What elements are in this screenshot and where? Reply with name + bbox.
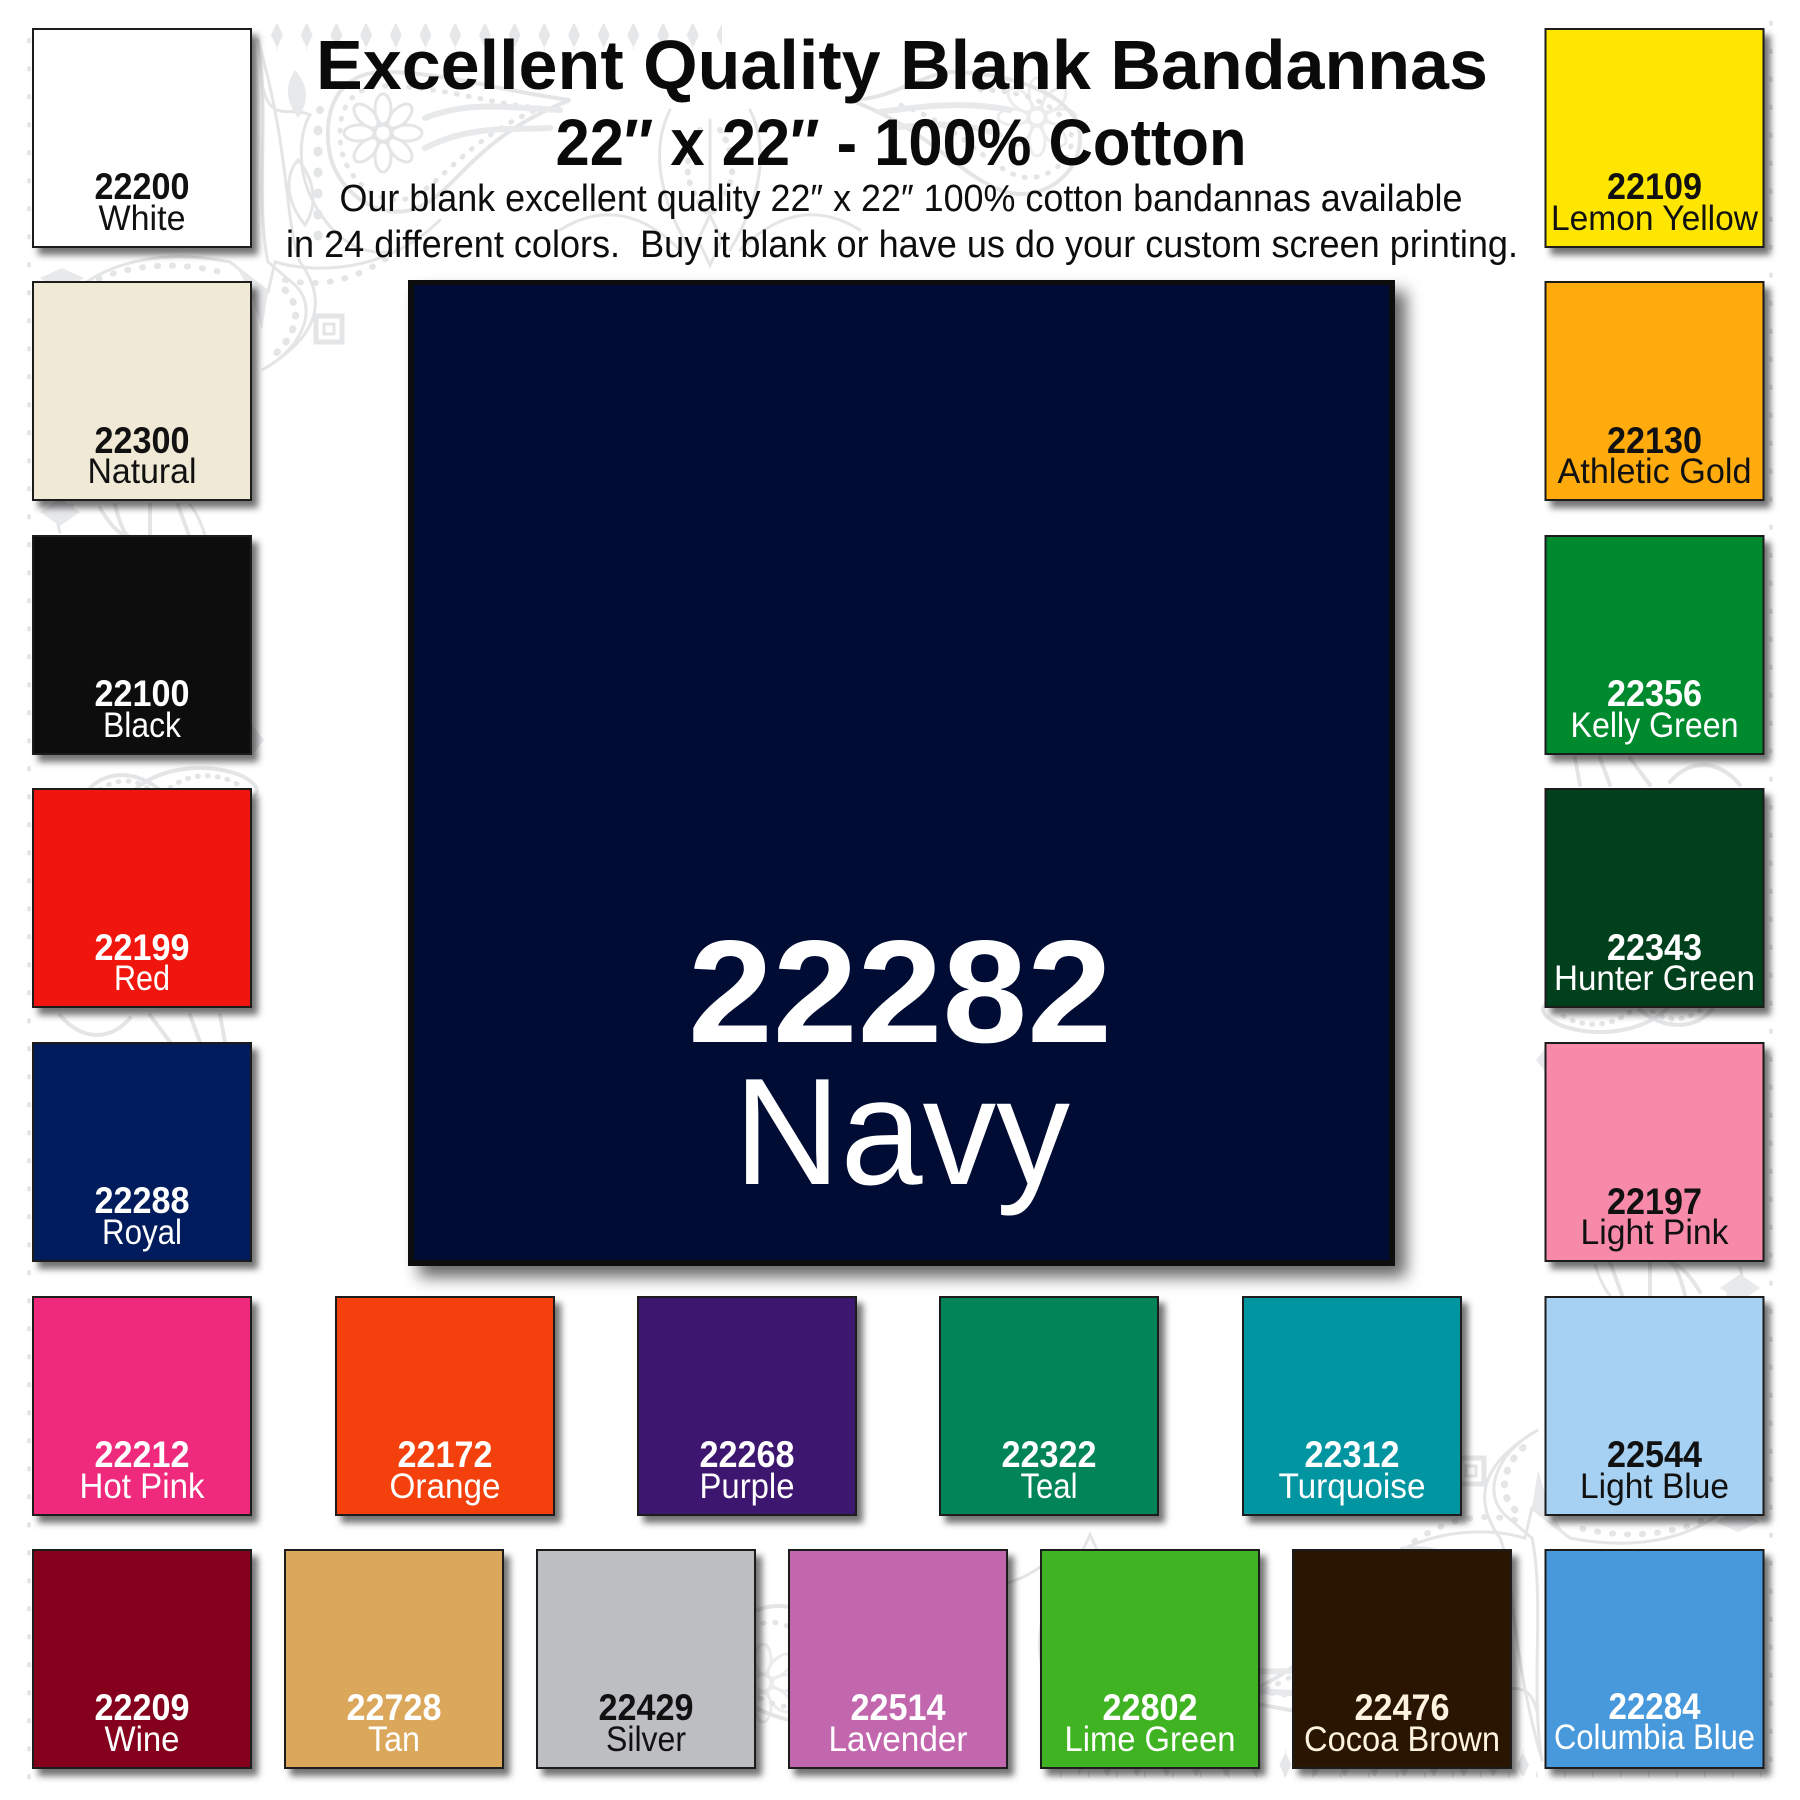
swatch: 22212 Hot Pink bbox=[33, 1297, 251, 1515]
code: 22284 bbox=[1608, 1686, 1701, 1727]
swatch: 22284 Columbia Blue bbox=[1546, 1550, 1764, 1768]
swatch: 22429 Silver bbox=[537, 1550, 755, 1768]
code: 22209 bbox=[94, 1687, 190, 1728]
name: Orange bbox=[390, 1467, 500, 1506]
swatch: 22100 Black bbox=[33, 536, 251, 754]
name: Natural bbox=[88, 452, 196, 491]
name: Royal bbox=[102, 1213, 182, 1252]
code: 22728 bbox=[346, 1687, 442, 1728]
code: 22130 bbox=[1607, 420, 1702, 461]
code: 22288 bbox=[94, 1180, 190, 1221]
code: 22429 bbox=[598, 1687, 694, 1728]
name: Columbia Blue bbox=[1554, 1718, 1755, 1757]
code: 22476 bbox=[1354, 1687, 1450, 1728]
swatch: 22268 Purple bbox=[638, 1297, 856, 1515]
swatch: 22514 Lavender bbox=[789, 1550, 1007, 1768]
code: 22197 bbox=[1607, 1181, 1702, 1222]
code: 22199 bbox=[94, 927, 190, 968]
code: 22514 bbox=[850, 1687, 946, 1728]
name: Athletic Gold bbox=[1558, 452, 1752, 491]
name: Lime Green bbox=[1064, 1720, 1236, 1759]
name: Silver bbox=[606, 1720, 686, 1759]
code: 22268 bbox=[700, 1434, 794, 1475]
swatch: 22728 Tan bbox=[285, 1550, 503, 1768]
main swatch: 22282 Navy bbox=[408, 280, 1395, 1266]
subtitle: 22″ x 22″ - 100% Cotton bbox=[556, 105, 1246, 179]
description line 2: in 24 different colors. Buy it blank or have us do your custom screen printing. bbox=[286, 224, 1518, 266]
name: Cocoa Brown bbox=[1304, 1720, 1500, 1759]
swatch: 22109 Lemon Yellow bbox=[1546, 29, 1764, 247]
swatch: 22209 Wine bbox=[33, 1550, 251, 1768]
swatch: 22312 Turquoise bbox=[1243, 1297, 1461, 1515]
swatch: 22343 Hunter Green bbox=[1546, 789, 1764, 1007]
name: Black bbox=[103, 706, 181, 745]
swatch: 22130 Athletic Gold bbox=[1546, 282, 1764, 500]
name: Light Blue bbox=[1580, 1467, 1729, 1506]
swatch: 22356 Kelly Green bbox=[1546, 536, 1764, 754]
code: 22212 bbox=[94, 1434, 190, 1475]
code: 22100 bbox=[94, 673, 190, 714]
name: White bbox=[98, 199, 186, 238]
name: Red bbox=[114, 959, 170, 998]
swatch: 22544 Light Blue bbox=[1546, 1297, 1764, 1515]
code: 22544 bbox=[1607, 1434, 1702, 1475]
swatch: 22200 White bbox=[33, 29, 251, 247]
name: Kelly Green bbox=[1570, 706, 1738, 745]
name: Light Pink bbox=[1580, 1213, 1729, 1252]
code: 22322 bbox=[1002, 1434, 1096, 1475]
name: Lavender bbox=[828, 1720, 968, 1759]
swatch: 22322 Teal bbox=[940, 1297, 1158, 1515]
code: 22802 bbox=[1102, 1687, 1198, 1728]
name: Tan bbox=[368, 1720, 420, 1759]
code: 22172 bbox=[398, 1434, 492, 1475]
swatch: 22476 Cocoa Brown bbox=[1293, 1550, 1511, 1768]
title: Excellent Quality Blank Bandannas bbox=[316, 26, 1488, 104]
name: Wine bbox=[104, 1720, 180, 1759]
name: Teal bbox=[1020, 1467, 1078, 1506]
code: 22109 bbox=[1607, 166, 1702, 207]
code: 22300 bbox=[94, 420, 190, 461]
code: 22343 bbox=[1607, 927, 1702, 968]
code: 22312 bbox=[1304, 1434, 1400, 1475]
name: Hot Pink bbox=[80, 1467, 205, 1506]
code: 22356 bbox=[1607, 673, 1702, 714]
name: Lemon Yellow bbox=[1551, 199, 1759, 238]
name: Turquoise bbox=[1278, 1467, 1426, 1506]
name: Purple bbox=[700, 1467, 794, 1506]
swatch: 22172 Orange bbox=[336, 1297, 554, 1515]
name: Hunter Green bbox=[1554, 959, 1755, 998]
swatch: 22300 Natural bbox=[33, 282, 251, 500]
main name: Navy bbox=[734, 1047, 1070, 1217]
swatch: 22197 Light Pink bbox=[1546, 1043, 1764, 1261]
main code: 22282 bbox=[688, 910, 1112, 1073]
swatch: 22802 Lime Green bbox=[1041, 1550, 1259, 1768]
swatch: 22199 Red bbox=[33, 789, 251, 1007]
swatch: 22288 Royal bbox=[33, 1043, 251, 1261]
code: 22200 bbox=[94, 166, 190, 207]
description line 1: Our blank excellent quality 22″ x 22″ 100% cotton bandannas available bbox=[340, 178, 1462, 220]
